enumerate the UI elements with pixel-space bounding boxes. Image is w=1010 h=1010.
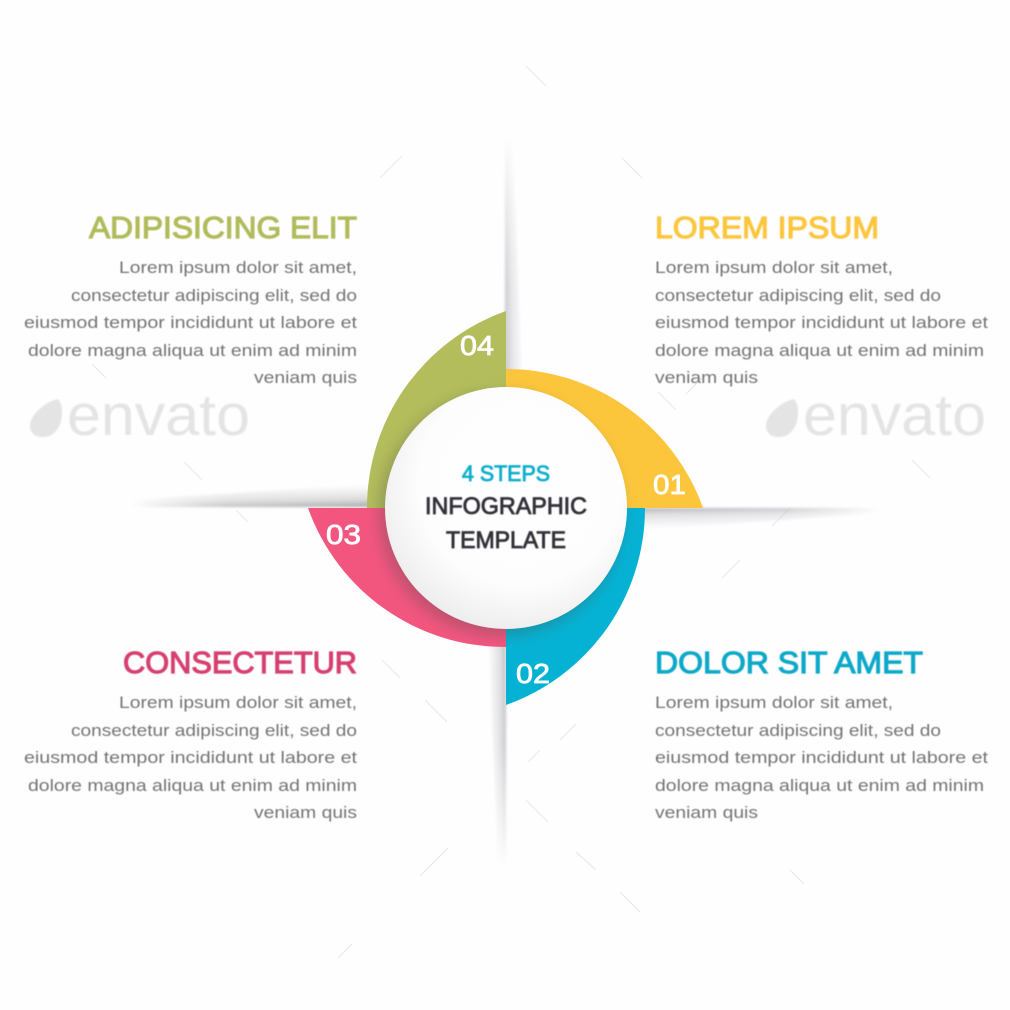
heading: adipisicing elit: ADIPISICING ELIT	[89, 210, 357, 245]
text block: adipisicing elit: dolore magna aliqua ut enim ad minim	[28, 341, 357, 360]
text block: dolor sit amet: eiusmod tempor incididunt ut labore et	[655, 748, 988, 767]
number 03: 03	[326, 519, 361, 550]
center label: template: TEMPLATE	[446, 527, 566, 554]
panel shadow: top	[504, 166, 520, 370]
watermark: right envato: envato	[803, 383, 986, 448]
center label	[425, 461, 587, 554]
text block: lorem ipsum: Lorem ipsum dolor sit amet,	[655, 258, 893, 277]
watermark pattern lines	[92, 66, 930, 958]
panel shadow: right	[644, 506, 860, 524]
panel shadow: bottom	[491, 646, 508, 844]
heading: lorem ipsum: LOREM IPSUM	[655, 210, 879, 245]
text block: adipisicing elit: Lorem ipsum dolor sit amet,	[119, 258, 357, 277]
center label: 4 steps: 4 STEPS	[462, 461, 550, 486]
text block: lorem ipsum: eiusmod tempor incididunt ut labore et	[655, 313, 988, 332]
text block: dolor sit amet: Lorem ipsum dolor sit amet,	[655, 693, 893, 712]
text block: lorem ipsum: veniam quis	[655, 368, 758, 387]
text block: consectetur: Lorem ipsum dolor sit amet,	[119, 693, 357, 712]
watermark: left envato: envato	[67, 383, 250, 448]
center label: infographic: INFOGRAPHIC	[425, 493, 587, 520]
heading: dolor sit amet: DOLOR SIT AMET	[655, 645, 923, 680]
text block: consectetur	[24, 645, 357, 822]
text block: dolor sit amet: consectetur adipiscing elit, sed do	[655, 721, 941, 740]
segment 02: blue arc	[506, 508, 645, 705]
text block: consectetur: consectetur adipiscing elit, sed do	[71, 721, 357, 740]
panel shadow: left	[148, 489, 368, 508]
text block: adipisicing elit: consectetur adipiscing elit, sed do	[71, 286, 357, 305]
text block: dolor sit amet: dolore magna aliqua ut enim ad minim	[655, 776, 984, 795]
number 02: 02	[516, 658, 550, 689]
segment 01: yellow arc	[506, 369, 703, 508]
text block: adipisicing elit: eiusmod tempor incididunt ut labore et	[24, 313, 357, 332]
text block: lorem ipsum: consectetur adipiscing elit, sed do	[655, 286, 941, 305]
number 01: 01	[653, 469, 686, 500]
text block: adipisicing elit	[24, 210, 357, 387]
text block: consectetur: eiusmod tempor incididunt ut labore et	[24, 748, 357, 767]
text block: consectetur: veniam quis	[254, 803, 357, 822]
step numbers	[326, 330, 686, 689]
number 04: 04	[460, 330, 494, 361]
segment 03: pink arc	[308, 508, 506, 647]
text block: dolor sit amet	[655, 645, 988, 822]
heading: consectetur: CONSECTETUR	[123, 645, 357, 680]
text block: lorem ipsum	[655, 210, 988, 387]
text block: lorem ipsum: dolore magna aliqua ut enim ad minim	[655, 341, 984, 360]
center disc	[385, 387, 627, 629]
text block: dolor sit amet: veniam quis	[655, 803, 758, 822]
segment 04: green arc	[367, 311, 506, 508]
text block: consectetur: dolore magna aliqua ut enim ad minim	[28, 776, 357, 795]
text block: adipisicing elit: veniam quis	[254, 368, 357, 387]
center disc shadow	[379, 392, 623, 636]
